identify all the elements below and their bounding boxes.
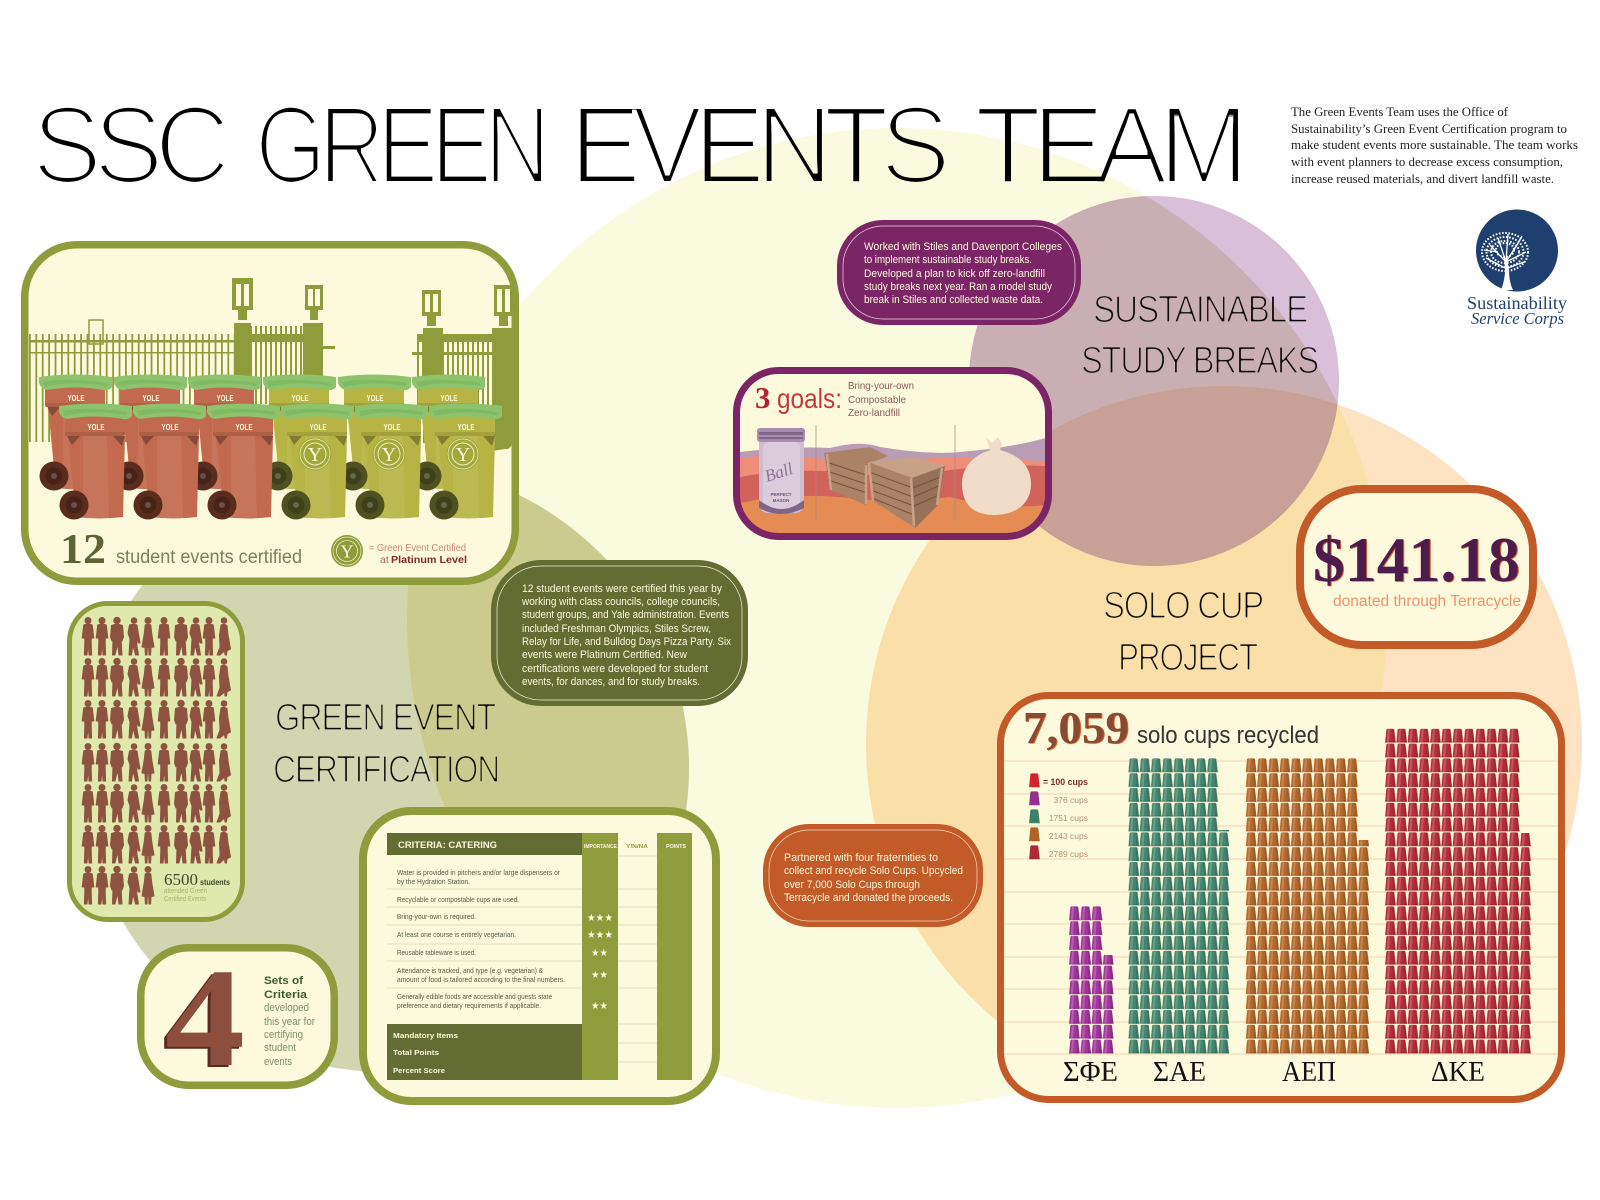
goals list — [848, 380, 914, 419]
callout: green event certification: Relay for Life, and Bulldog Days Pizza Party. Six — [522, 636, 731, 648]
callout: solo cup project: collect and recycle Solo Cups. Upcycled — [784, 865, 963, 877]
table footer: Percent Score — [393, 1066, 445, 1075]
stat: 6500 students attended — [164, 870, 230, 903]
criteria text: Attendance is tracked, and type (e.g. vegetarian) & — [397, 966, 543, 975]
logo: Sustainability Service Corps: Service Corps — [1471, 309, 1564, 328]
logo: Sustainability Service Corps — [1467, 210, 1567, 328]
callout: green event certification: working with class councils, college councils, — [521, 596, 720, 608]
table footer — [387, 1024, 582, 1080]
people silhouettes — [82, 617, 230, 904]
stat: 6500 students attended: 6500 — [164, 870, 198, 889]
heading: solo cup project: PROJECT — [1118, 637, 1258, 679]
importance stars: ★★ — [591, 970, 608, 981]
cup stack: sigma alpha epsilon — [1128, 758, 1230, 1054]
legend: 376 cups — [1054, 795, 1088, 805]
table header — [387, 833, 692, 1080]
criteria description: Sets of — [264, 975, 303, 987]
legend: 2143 cups — [1049, 831, 1088, 841]
importance stars: ★★★ — [587, 930, 613, 941]
table header: IMPORTANCE — [584, 844, 618, 850]
callout: sustainable study breaks: break in Stiles and collected waste data. — [864, 294, 1043, 306]
panel: 12 student events certified — [25, 245, 515, 581]
panel: criteria catering table — [363, 811, 716, 1101]
dividers — [816, 425, 955, 521]
criteria description: Criteria — [264, 989, 308, 1001]
icon: mason jar: MASON — [773, 498, 789, 503]
callout: green event certification: certifications were developed for student — [522, 663, 708, 675]
callout: sustainable study breaks: Worked with Stiles and Davenport Colleges — [864, 241, 1062, 253]
table footer: Total Points — [393, 1048, 439, 1057]
big number 4: 4 — [165, 940, 245, 1096]
callout: solo cup project — [763, 824, 983, 927]
goals list: Compostable — [848, 394, 906, 406]
stat: 12 student events certified: 12 — [60, 527, 106, 573]
intro text block: The Green Events Team uses the Office of — [1291, 105, 1509, 119]
legend: 1751 cups — [1049, 813, 1088, 823]
cup stack: sigma phi epsilon — [1069, 906, 1114, 1054]
icon: mason jar: PERFECT — [770, 492, 792, 497]
fraternity labels: ΔΚΕ — [1431, 1057, 1485, 1088]
callout: green event certification — [491, 560, 748, 706]
heading: green event certification — [273, 697, 499, 791]
fraternity labels — [1063, 1057, 1485, 1088]
chart title: 7,059 — [1023, 703, 1129, 753]
stat: 6500 students attended: attended Green — [164, 888, 207, 895]
legend: platinum level badge: Y — [340, 542, 354, 562]
intro text block — [1291, 105, 1578, 186]
criteria text: amount of food is tailored according to the final numbers. — [397, 975, 565, 984]
table footer: Mandatory Items — [393, 1031, 458, 1040]
title: GREEN — [255, 84, 543, 207]
criteria description: developed — [264, 1002, 309, 1014]
fraternity labels: ΣΦΕ — [1063, 1057, 1118, 1088]
criteria description: student — [264, 1042, 296, 1054]
heading: solo cup project — [1103, 585, 1263, 679]
criteria text: preference and dietary requirements if applicable. — [397, 1001, 541, 1010]
callout: sustainable study breaks: Developed a plan to kick off zero-landfill — [864, 268, 1045, 280]
criteria description: this year for — [264, 1016, 315, 1028]
callout: sustainable study breaks — [837, 220, 1081, 325]
logo: Sustainability Service Corps: Sustainability — [1467, 293, 1567, 313]
panel: 3 goals — [736, 370, 1048, 536]
fraternity labels: ΣΑΕ — [1153, 1057, 1206, 1088]
callout: green event certification: student groups, and Yale administration. Events — [522, 609, 729, 621]
intro text block: make student events more sustainable. The team works — [1291, 138, 1578, 152]
criteria text: Reusable tableware is used. — [397, 948, 476, 957]
callout: solo cup project: Terracycle and donated the proceeds. — [784, 892, 953, 904]
callout: green event certification: included Freshman Olympics, Stiles Screw, — [522, 623, 711, 635]
title — [32, 84, 1240, 207]
title: SSC — [32, 84, 227, 207]
panel: 141.18 donated — [1300, 489, 1533, 645]
heading: sustainable study breaks — [1081, 289, 1318, 382]
criteria text: Water is provided in pitchers and/or large dispensers or — [397, 868, 561, 877]
3 goals heading: goals: — [777, 383, 842, 414]
legend: 2789 cups — [1049, 849, 1088, 859]
heading: solo cup project: SOLO CUP — [1103, 585, 1263, 627]
goals list: Bring-your-own — [848, 380, 914, 392]
panel: 6500 students — [70, 604, 242, 920]
legend: platinum level badge: at — [380, 554, 389, 566]
table header: POINTS — [666, 844, 687, 850]
title: TEAM — [975, 84, 1240, 207]
intro text block: with event planners to decrease excess consumption, — [1291, 155, 1563, 169]
heading: green event certification: CERTIFICATION — [273, 749, 499, 791]
icon: trash bag — [962, 437, 1031, 515]
callout: sustainable study breaks: to implement sustainable study breaks. — [864, 254, 1032, 266]
chart title — [1023, 703, 1319, 753]
3 goals heading — [755, 380, 842, 415]
cup stack: delta kappa epsilon — [1385, 728, 1531, 1054]
criteria text: by the Hydration Station. — [397, 877, 470, 886]
importance stars: ★★ — [591, 948, 608, 959]
goals list: Zero-landfill — [848, 407, 900, 419]
fence and gates — [29, 278, 513, 451]
legend: platinum level badge: Platinum Level — [391, 554, 467, 566]
caption: donated through Terracycle — [1333, 593, 1521, 610]
callout: solo cup project: Partnered with four fraternities to — [784, 852, 938, 864]
stat: 12 student events certified — [60, 527, 302, 573]
panel: 4 sets of criteria — [141, 940, 334, 1096]
criteria description — [264, 975, 315, 1068]
icon: mason jar: Ball — [762, 459, 795, 486]
stat: 6500 students attended: Certified Events — [164, 896, 206, 903]
venn circles background — [81, 128, 1582, 1108]
criteria text: At least one course is entirely vegetarian. — [397, 930, 516, 939]
table header: Y/N/NA — [626, 844, 648, 850]
criteria text: Recyclable or compostable cups are used. — [397, 895, 519, 904]
cup stack: alpha epsilon pi — [1246, 758, 1369, 1054]
table rows — [387, 856, 692, 1062]
criteria description: certifying — [264, 1029, 303, 1041]
stat: 6500 students attended: students — [200, 878, 230, 887]
chart title: solo cups recycled — [1137, 722, 1319, 749]
heading: green event certification: GREEN EVENT — [275, 697, 496, 739]
intro text block: Sustainability’s Green Event Certification program to — [1291, 122, 1567, 136]
amount: $141.18 — [1313, 525, 1520, 595]
criteria text — [397, 868, 565, 1010]
criteria text: Generally edible foods are accessible and guests state — [397, 992, 552, 1001]
callout: green event certification: events were Platinum Certified. New — [522, 649, 687, 661]
legend — [1029, 773, 1088, 859]
heading: sustainable study breaks: SUSTAINABLE — [1093, 289, 1307, 331]
wheeled bins — [39, 374, 502, 520]
importance stars: ★★★ — [587, 913, 613, 924]
callout: green event certification: events, for dances, and for study breaks. — [522, 676, 700, 688]
fraternity labels: ΑΕΠ — [1282, 1057, 1336, 1088]
heading: sustainable study breaks: STUDY BREAKS — [1081, 340, 1318, 382]
layered landscape waves — [740, 438, 1046, 533]
title: EVENTS — [570, 84, 946, 207]
intro text block: increase reused materials, and divert landfill waste. — [1291, 172, 1554, 186]
legend: platinum level badge — [331, 535, 467, 567]
criteria description: events — [264, 1056, 292, 1068]
grid lines — [1004, 761, 1558, 1054]
icon: mason jar — [757, 428, 805, 514]
callout: green event certification: 12 student events were certified this year by — [522, 583, 722, 595]
callout: sustainable study breaks: study breaks next year. Ran a model study — [864, 281, 1052, 293]
table header: CRITERIA: CATERING — [398, 840, 497, 851]
importance stars: ★★ — [591, 1001, 608, 1012]
legend: platinum level badge: = Green Event Certified — [369, 542, 466, 554]
panel: solo cups chart — [1000, 696, 1562, 1100]
callout: solo cup project: over 7,000 Solo Cups through — [784, 879, 920, 891]
legend: = 100 cups — [1043, 777, 1088, 787]
stat: 12 student events certified: student events certified — [116, 547, 302, 568]
3 goals heading: 3 — [755, 380, 770, 415]
importance stars — [587, 913, 613, 1012]
icon: compost crates — [824, 447, 945, 528]
criteria text: Bring-your-own is required. — [397, 912, 476, 921]
